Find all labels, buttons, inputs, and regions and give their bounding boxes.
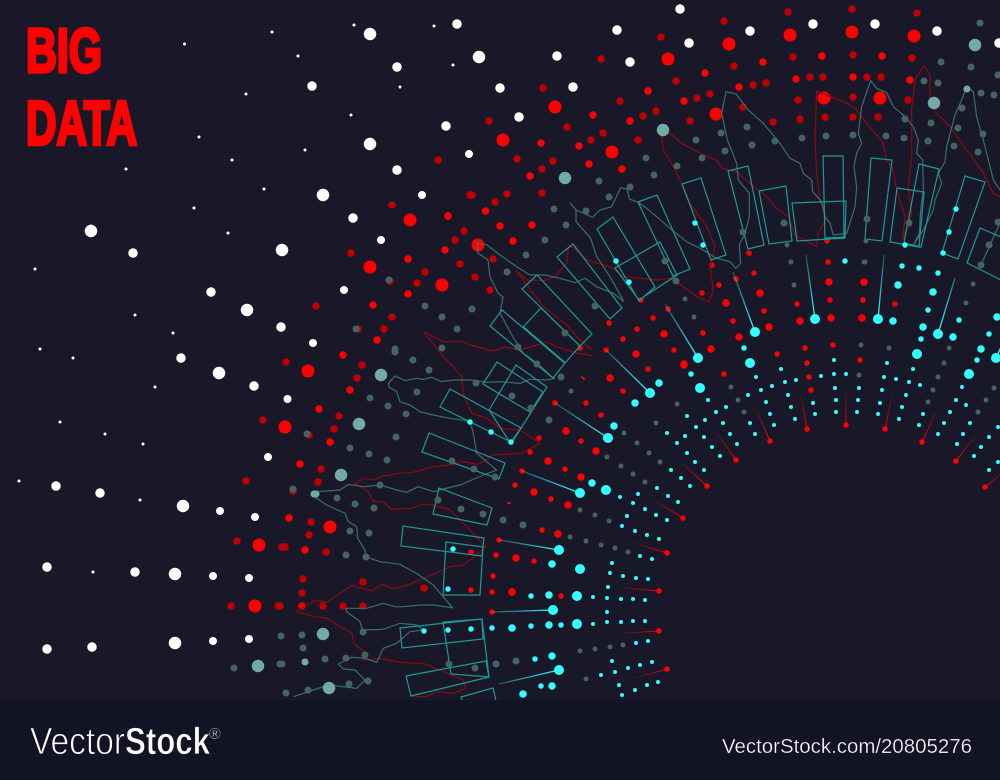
inner grid: tiny cyan dots bbox=[593, 360, 998, 695]
small light teal dots bbox=[305, 89, 967, 662]
title: BIG DATA: DATA bbox=[26, 90, 137, 158]
medium cyan dots bbox=[512, 285, 997, 694]
cyan connector lines bbox=[492, 255, 1000, 684]
inner ring: dim teal dots bbox=[234, 23, 998, 693]
outer ring: small white dots bbox=[213, 154, 469, 641]
data bar outlines around the arc bbox=[400, 156, 1000, 710]
footer logo: VectorStock: Vector bbox=[30, 721, 125, 763]
footer URL text: VectorStock.com/20805276 bbox=[722, 736, 972, 758]
inner grid: small dim teal dots bbox=[570, 241, 994, 679]
wiggly red trace lines bbox=[296, 66, 1000, 697]
red spike end dots bbox=[659, 425, 985, 669]
middle ring: dim red dots bbox=[231, 9, 917, 606]
inner ring: small red dots bbox=[471, 241, 895, 612]
title: BIG DATA: BIG bbox=[26, 17, 102, 86]
small cyan dots on bars bbox=[424, 209, 989, 686]
middle and inner rings: medium red dots bbox=[289, 56, 910, 606]
footer band bbox=[0, 700, 1000, 780]
red spike lines on inner edge bbox=[625, 392, 1000, 678]
highlighted light teal dots bbox=[258, 45, 975, 688]
footer logo: VectorStock: Stock bbox=[125, 721, 211, 763]
outer ring: medium white dots bbox=[47, 9, 999, 649]
outer ring: large white dots bbox=[91, 34, 479, 643]
footer logo: VectorStock bbox=[30, 721, 221, 763]
middle ring: large red dots bbox=[255, 32, 914, 606]
large cyan node dots bbox=[553, 319, 996, 670]
outer ring: tiny white specks bbox=[19, 25, 453, 572]
clipped red marks bbox=[508, 377, 584, 503]
wiggly teal trace lines bbox=[293, 81, 1000, 697]
footer logo: VectorStock: ® bbox=[209, 726, 221, 743]
title: BIG DATA bbox=[26, 17, 137, 158]
